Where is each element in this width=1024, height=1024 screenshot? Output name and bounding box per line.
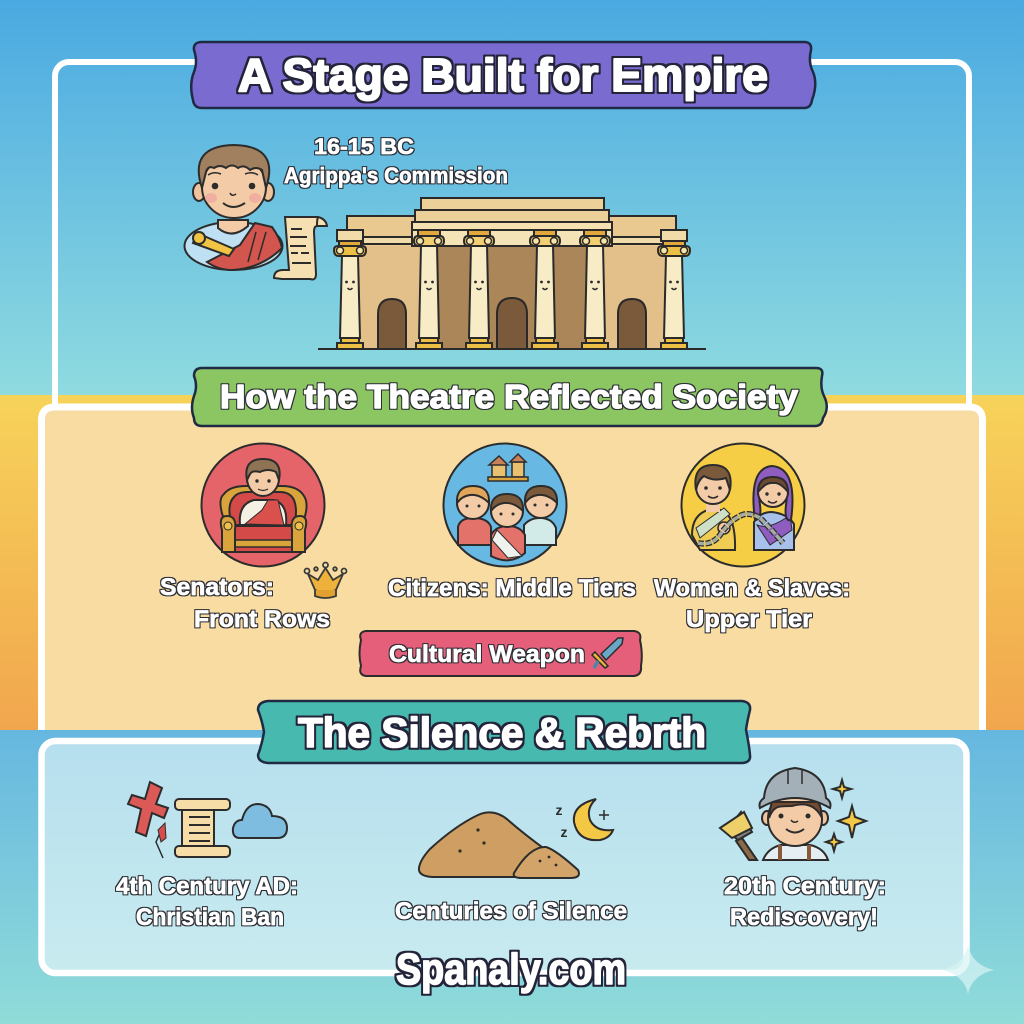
columns	[334, 230, 690, 349]
icon: moon and zzz	[556, 799, 613, 840]
heading: society: How the Theatre Reflected Society	[220, 378, 799, 415]
icon: archaeologist	[720, 768, 866, 860]
label: christian ban: Christian Ban	[136, 904, 284, 931]
icon: ban cross scroll cloud	[128, 782, 287, 858]
label: senators: Front Rows	[194, 606, 330, 633]
icon: scroll	[274, 217, 327, 279]
icon: sword	[592, 638, 623, 668]
arches	[378, 298, 646, 349]
callout: cultural weapon: Cultural Weapon	[389, 641, 585, 668]
icon: moon and zzz: z	[556, 802, 562, 818]
label: christian ban: 4th Century AD:	[116, 873, 298, 900]
small buildings	[488, 454, 528, 481]
banner: society heading	[192, 368, 827, 426]
title banner	[191, 42, 815, 108]
label: rediscovery: Rediscovery!	[730, 904, 878, 931]
panel: society	[42, 407, 982, 730]
label: women and slaves	[654, 575, 850, 633]
icon: mound of sand	[419, 812, 579, 878]
heading: silence: The Silence & Rebrth	[298, 709, 706, 756]
label: centuries of silence: Centuries of Silence	[395, 898, 627, 925]
date text: Agrippa's commission: Agrippa's Commission	[284, 163, 508, 188]
label: rediscovery	[724, 873, 886, 931]
label: women and slaves: Upper Tier	[686, 606, 812, 633]
icon: theatre building	[318, 198, 706, 350]
label: women and slaves: Women & Slaves:	[654, 575, 850, 602]
icon: moon and zzz: z	[560, 824, 568, 840]
label: senators: Senators:	[160, 574, 274, 601]
icon: corner sparkle	[942, 945, 994, 994]
callout: cultural weapon	[360, 631, 642, 676]
label: rediscovery: 20th Century:	[724, 873, 886, 900]
date text: Agrippa's commission: 16-15 BC	[314, 134, 414, 159]
icon: women and slaves	[682, 444, 804, 566]
icon: Agrippa portrait	[184, 145, 282, 270]
banner: silence heading	[258, 701, 750, 763]
footer brand: Spanaly.com	[396, 945, 626, 994]
panel: empire frame	[55, 62, 969, 462]
label: senators	[160, 574, 330, 633]
title: A Stage Built for Empire	[238, 49, 768, 101]
panel: silence and rebirth	[42, 741, 966, 973]
icon: senator on throne	[202, 444, 324, 566]
label: citizens: Citizens: Middle Tiers	[388, 575, 636, 602]
icon: citizens	[444, 444, 566, 566]
label: christian ban	[116, 873, 298, 931]
icon: crown	[304, 562, 346, 598]
date text: Agrippa's commission	[284, 134, 508, 188]
